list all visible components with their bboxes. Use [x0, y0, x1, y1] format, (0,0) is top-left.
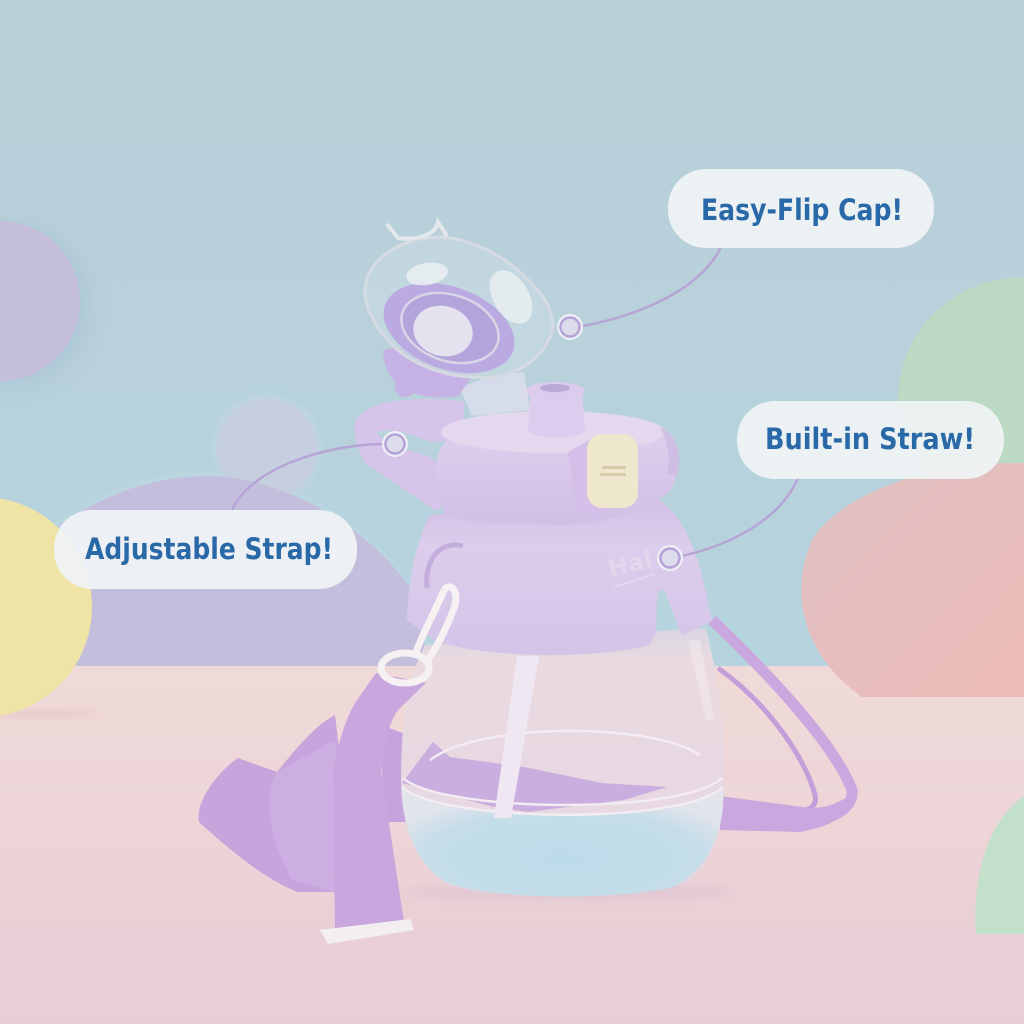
bottle skirt — [407, 500, 712, 655]
strap: back loop inner fold — [269, 740, 340, 892]
wall background — [0, 0, 1024, 680]
carabiner clip — [381, 587, 456, 683]
bottle base water — [402, 787, 723, 897]
strap: right side — [712, 620, 856, 832]
flip cap — [365, 222, 553, 397]
strap arm — [355, 399, 465, 510]
strap: front band — [333, 673, 426, 930]
spout — [525, 382, 585, 438]
button housing — [568, 440, 612, 514]
strap: left part behind bottle — [378, 724, 408, 822]
clear hinge — [460, 372, 530, 416]
skirt strap loop — [427, 545, 463, 588]
callout: Adjustable Strap: Adjustable Strap! — [85, 532, 333, 566]
glass rim lines — [402, 731, 723, 815]
iridescent highlight — [688, 640, 714, 720]
lid top surface — [441, 411, 665, 453]
strap inside bottle — [402, 742, 667, 812]
callout: Easy-Flip Cap — [557, 169, 934, 340]
callout: Easy-Flip Cap: Easy-Flip Cap! — [701, 193, 903, 227]
strap: back loop — [199, 715, 345, 892]
floor shadow — [405, 882, 735, 902]
callout: Built-in Straw: Built-in Straw! — [765, 422, 975, 456]
button — [587, 434, 638, 508]
floor — [0, 666, 1024, 1024]
callout: Adjustable Strap — [54, 431, 408, 589]
lid rear tab — [660, 428, 679, 476]
callout: Built-in Straw — [657, 401, 1004, 571]
bottle body — [401, 628, 724, 895]
lid — [436, 417, 678, 525]
water bottle — [199, 222, 856, 944]
strap: end buckle — [320, 919, 414, 944]
straw — [494, 656, 539, 818]
decor: pastel shapes behind bottle — [0, 221, 1024, 934]
embossed logo: Hal — [605, 545, 655, 583]
